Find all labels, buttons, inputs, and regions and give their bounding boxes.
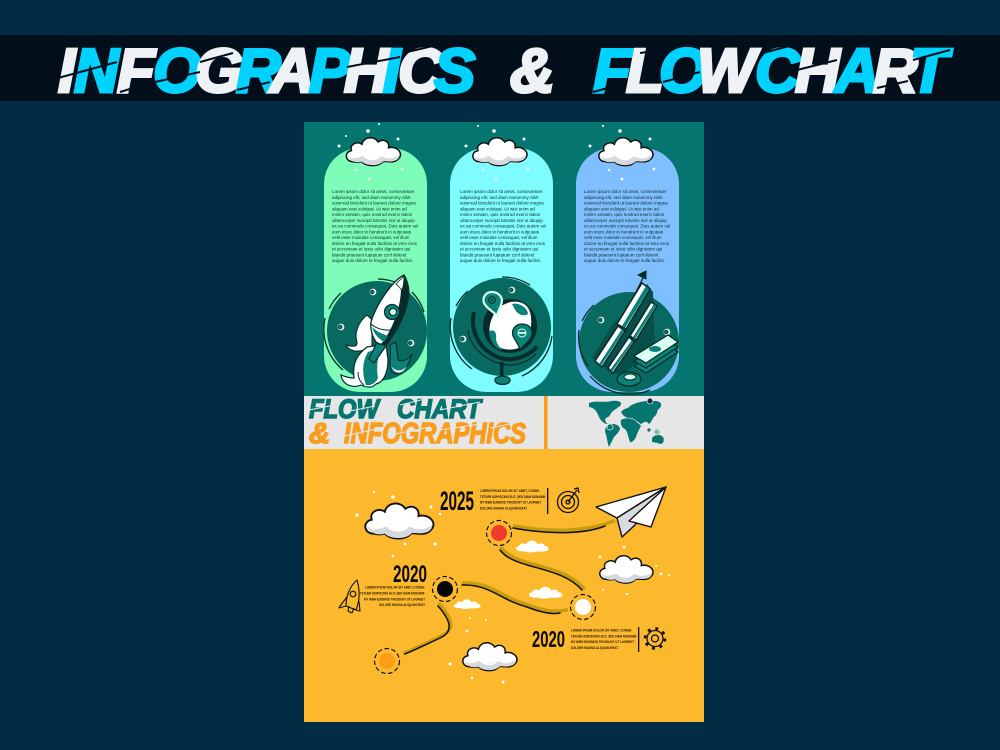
block 2020 right: DOLORE MAGNA ALIQUAM ERAT xyxy=(571,645,618,650)
main flame xyxy=(341,344,388,387)
map pin 2 xyxy=(512,324,532,350)
block 2025: TETUER ADIPISCING ELIT, SED DIAM NONUMM- xyxy=(480,494,547,499)
column 1: rocket xyxy=(324,123,427,392)
block 2020 right xyxy=(532,626,665,652)
title: P xyxy=(309,37,351,106)
text block 2: ullamcorper suscipit lobortis nisl ut aliquip xyxy=(460,218,543,223)
text block 3: euismod tincidunt ut laoreet dolore magna xyxy=(584,200,668,206)
divider xyxy=(544,396,548,449)
text block 1: ex ea commodo consequat. Duis autem vel xyxy=(332,224,418,228)
text block 2: velit esse molestie consequat, vel illum xyxy=(460,235,538,240)
text block 3: augue duis dolore te feugait nulla facilisi. xyxy=(584,258,665,263)
title: O xyxy=(659,37,707,106)
icon: bars and money xyxy=(579,271,679,394)
text block 3: eum iriure dolor in hendrerit in vulputate xyxy=(584,229,664,234)
cloud bottom xyxy=(448,617,517,684)
block 2020 right: TETUER ADIPISCING ELIT, SED DIAM NONUMM- xyxy=(571,633,638,638)
text block 1: et accumsan et iusto odio dignissim qui xyxy=(332,246,410,252)
block 2020 left: 2020 xyxy=(393,561,427,588)
title: C xyxy=(398,37,444,106)
text block 1: blandit praesent luptatum zzril delenit xyxy=(332,252,407,257)
text block 2: eum iriure dolor in hendrerit in vulputate xyxy=(460,229,540,234)
left arm flame xyxy=(346,315,372,351)
icon: globe xyxy=(450,277,552,384)
column 2: globe xyxy=(450,125,553,392)
right flame xyxy=(390,342,412,374)
title: G xyxy=(195,37,243,106)
text block 1: aliquam erat volutpat. Ut wisi enim ad xyxy=(332,206,407,211)
text block 1: augue duis dolore te feugait nulla facilisi. xyxy=(332,258,413,263)
icon: rocket xyxy=(324,275,427,387)
title: I xyxy=(383,37,402,106)
marker orange xyxy=(374,648,400,674)
icon: rocket outline xyxy=(339,580,360,613)
text block 2: aliquam erat volutpat. Ut wisi enim ad xyxy=(460,206,535,211)
text block 3: minim veniam, quis nostrud exerci tation xyxy=(584,212,665,217)
title: T xyxy=(910,37,953,106)
block 2020 left: TETUER ADIPISCING ELIT, SED DIAM NONUMM- xyxy=(360,590,426,595)
world map xyxy=(589,398,664,447)
title: F xyxy=(117,37,157,106)
text block 2: adipiscing elit, sed diam nonummy nibh xyxy=(460,195,539,200)
block 2020 right: MY NIBH EUISMOD TINCIDUNT UT LAOREET xyxy=(571,639,634,644)
panel: yellow timeline xyxy=(304,449,704,722)
text block 1: eum iriure dolor in hendrerit in vulputate xyxy=(332,229,412,234)
marker white xyxy=(570,594,596,620)
title: C xyxy=(755,37,801,106)
paper plane xyxy=(596,487,666,537)
banner heading: CHART xyxy=(397,394,483,424)
block 2020 left: DOLORE MAGNA ALIQUAM ERAT xyxy=(379,602,425,607)
title: A xyxy=(268,37,315,106)
banner heading: & xyxy=(309,418,330,450)
block 2025: MY NIBH EUISMOD TINCIDUNT UT LAOREET xyxy=(480,500,541,505)
small clouds xyxy=(454,541,562,609)
title: S xyxy=(434,37,475,106)
block 2020 left: MY NIBH EUISMOD TINCIDUNT UT LAOREET xyxy=(364,596,425,601)
text block 3: Lorem ipsum dolor sit amet, consectetuer xyxy=(584,189,667,194)
title: N xyxy=(74,37,120,106)
block 2025: LOREM IPSUM DOLOR SIT AMET, CONSE- xyxy=(480,488,541,493)
text block 3: dolore eu feugiat nulla facilisis at vero eros xyxy=(584,241,670,246)
marker 2020 black xyxy=(432,576,458,602)
text block 3: adipiscing elit, sed diam nonummy nibh xyxy=(584,195,663,200)
text block 1: Lorem ipsum dolor sit amet, consectetuer xyxy=(332,189,415,194)
map pin xyxy=(483,292,502,316)
panel: teal columns xyxy=(304,122,704,396)
title band xyxy=(0,35,1000,106)
marker 2025 red xyxy=(486,520,512,546)
block 2025: DOLORE MAGNA ALIQUAM ERAT xyxy=(480,505,527,510)
text block 3: ex ea commodo consequat. Duis autem vel xyxy=(584,224,670,228)
block 2020 left xyxy=(339,561,427,613)
text block 1: euismod tincidunt ut laoreet dolore magna xyxy=(332,200,416,206)
text block 3: et accumsan et iusto odio dignissim qui xyxy=(584,246,662,252)
title: W xyxy=(697,37,760,106)
icon: target xyxy=(558,488,579,512)
cloud 2 xyxy=(464,125,529,180)
rocket body xyxy=(371,275,409,345)
title: F xyxy=(593,37,633,106)
title: R xyxy=(236,37,281,106)
cloud 3 xyxy=(588,125,655,180)
block 2025: 2025 xyxy=(440,486,474,516)
banner heading: FLOW xyxy=(309,394,381,424)
cloud large left xyxy=(355,491,441,557)
cloud 1 xyxy=(338,123,403,180)
text block 2: Lorem ipsum dolor sit amet, consectetuer xyxy=(460,189,543,194)
text block 1: dolore eu feugiat nulla facilisis at vero eros xyxy=(332,241,418,246)
text block 1: minim veniam, quis nostrud exerci tation xyxy=(332,212,413,217)
title: O xyxy=(153,37,201,106)
cloud right xyxy=(599,546,670,595)
text block 2: et accumsan et iusto odio dignissim qui xyxy=(460,246,538,252)
block 2020 left: LOREM IPSUM DOLOR SIT AMET, CONSE- xyxy=(365,584,426,590)
route paths xyxy=(404,521,614,654)
banner heading: INFOGRAPHICS xyxy=(344,418,527,450)
text block 3: aliquam erat volutpat. Ut wisi enim ad xyxy=(584,206,659,211)
banner heading xyxy=(309,394,527,450)
title: A xyxy=(833,37,880,106)
text block 2: euismod tincidunt ut laoreet dolore magna xyxy=(460,200,544,206)
block 2025 xyxy=(440,486,579,516)
text block 2: minim veniam, quis nostrud exerci tation xyxy=(460,212,541,217)
text block 1: adipiscing elit, sed diam nonummy nibh xyxy=(332,195,411,200)
text block 2: blandit praesent luptatum zzril delenit xyxy=(460,252,535,257)
title: L xyxy=(626,37,664,106)
block 2020 right: LOREM IPSUM DOLOR SIT AMET, CONSE- xyxy=(571,628,633,632)
title: I xyxy=(58,37,77,106)
title: H xyxy=(344,37,390,106)
title: H xyxy=(795,37,841,106)
title xyxy=(58,37,953,106)
title: & xyxy=(510,37,555,106)
ring xyxy=(473,312,537,359)
banner xyxy=(304,394,704,450)
text block 3: velit esse molestie consequat, vel illum xyxy=(584,235,662,240)
icon: gear xyxy=(645,628,665,648)
globe body xyxy=(489,302,531,350)
text block 2: ex ea commodo consequat. Duis autem vel xyxy=(460,224,546,228)
text block 2: dolore eu feugiat nulla facilisis at vero eros xyxy=(460,241,546,246)
block 2020 right: 2020 xyxy=(532,626,565,652)
text block 1: velit esse molestie consequat, vel illum xyxy=(332,235,410,240)
text block 2: augue duis dolore te feugait nulla facilisi. xyxy=(460,258,541,263)
column 3: growth chart xyxy=(576,125,679,394)
title: R xyxy=(873,37,918,106)
text block 3: blandit praesent luptatum zzril delenit xyxy=(584,252,659,257)
text block 3: ullamcorper suscipit lobortis nisl ut aliquip xyxy=(584,218,667,223)
text block 1: ullamcorper suscipit lobortis nisl ut aliquip xyxy=(332,218,415,223)
